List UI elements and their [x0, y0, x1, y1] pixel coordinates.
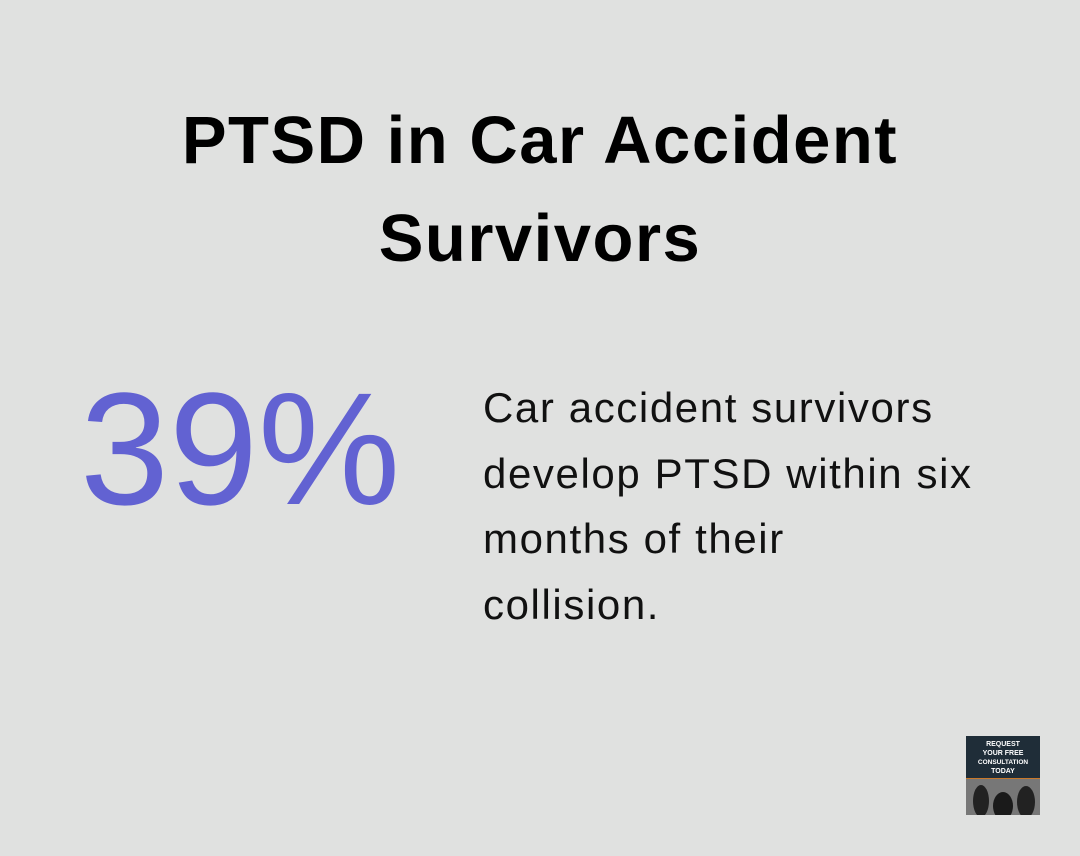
description text: develop PTSD within six [483, 450, 973, 496]
description text [483, 384, 973, 628]
statistic: 39%: 39% [80, 359, 400, 538]
description text: collision. [483, 580, 660, 628]
title [182, 103, 898, 276]
description text: months of their [483, 515, 785, 562]
badge: consultation: REQUEST [986, 741, 1021, 748]
badge: consultation: TODAY [991, 768, 1015, 775]
badge: consultation: CONSULTATION [978, 759, 1028, 766]
badge: consultation [966, 736, 1040, 815]
title: PTSD in Car Accident [182, 103, 898, 178]
badge: consultation: YOUR FREE [983, 750, 1024, 757]
description text: Car accident survivors [483, 384, 934, 431]
title: Survivors [379, 201, 701, 276]
